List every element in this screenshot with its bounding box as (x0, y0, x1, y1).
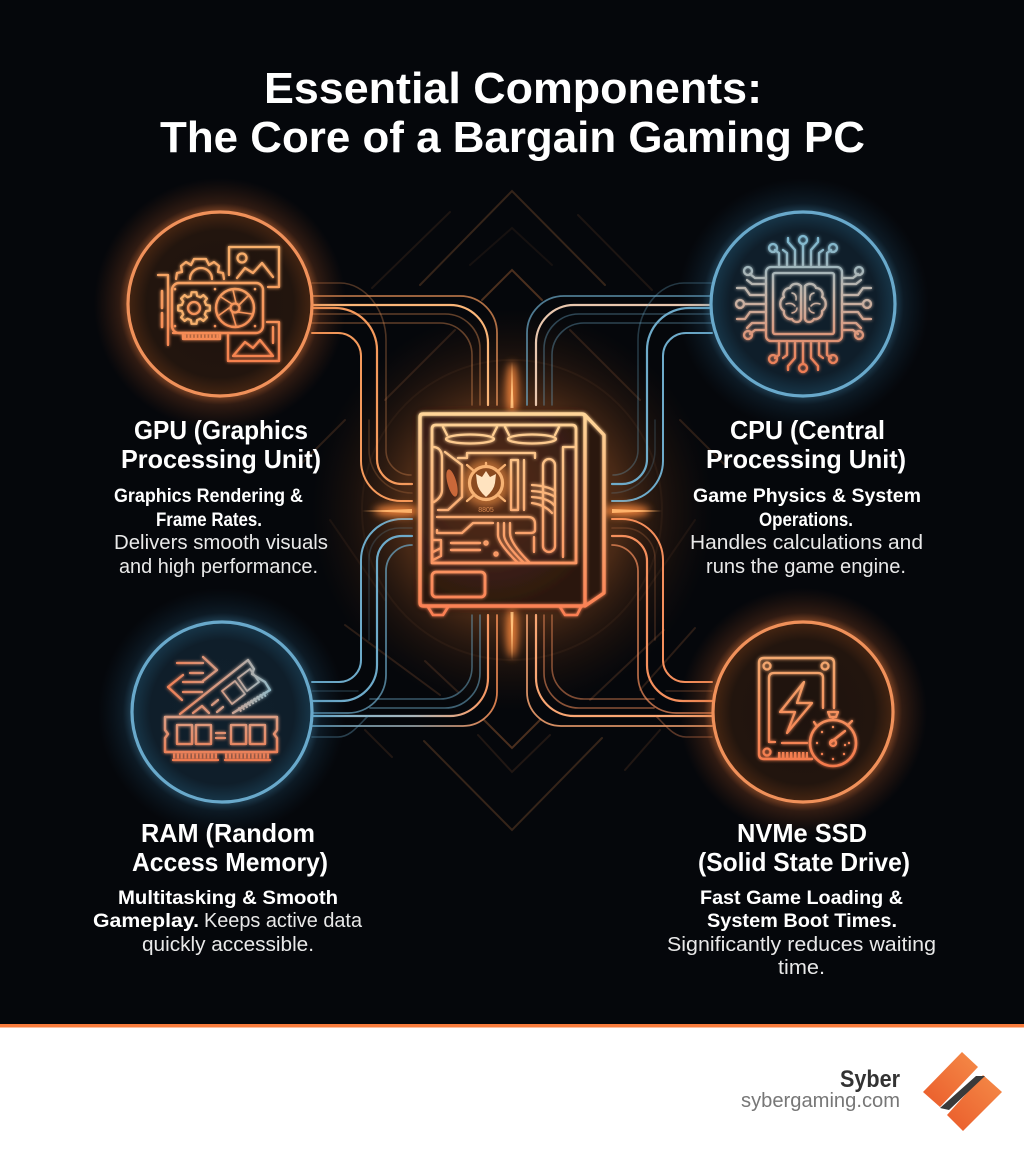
heading: SSD: (Solid State Drive) (698, 847, 910, 877)
logo (923, 1052, 1002, 1131)
footer brand text: sybergaming.com (741, 1090, 900, 1112)
footer brand text: Syber (840, 1066, 900, 1093)
text: SSD description: time. (778, 957, 825, 979)
heading: SSD (698, 818, 910, 877)
energy sparks around case (362, 362, 662, 660)
circuit pipes: CPU to case (527, 283, 712, 501)
processor emblem: 8805 (478, 507, 494, 514)
heading: RAM: RAM (Random (141, 818, 315, 848)
text: GPU description (114, 486, 328, 578)
heading: GPU: GPU (Graphics (134, 415, 308, 445)
text: RAM description: Keeps active data (204, 910, 363, 932)
title: The Core of a Bargain Gaming PC (160, 113, 865, 162)
text: RAM description: Multitasking & Smooth (118, 888, 338, 909)
heading: GPU (121, 415, 321, 474)
icon: RAM circle (98, 588, 346, 836)
heading: SSD: NVMe SSD (737, 818, 867, 848)
text: CPU description: Handles calculations and (690, 532, 923, 554)
heading: CPU: Processing Unit) (706, 444, 906, 474)
processor emblem (462, 459, 510, 514)
text: CPU description: Operations. (759, 510, 853, 531)
text: GPU description: Delivers smooth visuals (114, 532, 328, 554)
background diamond pattern (300, 191, 725, 830)
text: RAM description (93, 888, 363, 956)
text: GPU description: Graphics Rendering & (114, 486, 303, 507)
text: SSD description: Fast Game Loading & (700, 888, 903, 909)
text: GPU description: and high performance. (119, 556, 318, 578)
footer band (0, 1024, 1024, 1154)
title (160, 64, 865, 162)
icon: GPU circle (94, 178, 346, 430)
text: CPU description: Game Physics & System (693, 486, 921, 507)
panel: NVMe SSD (667, 588, 936, 979)
panel: CPU (677, 178, 929, 578)
heading: CPU (706, 415, 906, 474)
text: SSD description: Significantly reduces waiting (667, 934, 936, 956)
title: Essential Components: (264, 64, 762, 113)
circuit pipes: RAM to case (310, 519, 497, 737)
heading: CPU: CPU (Central (730, 415, 885, 445)
panel: RAM (93, 588, 363, 956)
circuit pipes: SSD to case (527, 519, 714, 737)
text: CPU description: runs the game engine. (706, 556, 906, 578)
center glow (312, 310, 712, 710)
text: SSD description (667, 888, 936, 979)
central PC case icon (420, 414, 604, 615)
icon: CPU circle (677, 178, 929, 430)
circuit pipes: GPU to case (312, 283, 497, 501)
heading: RAM: Access Memory) (132, 847, 328, 877)
footer brand text (741, 1066, 900, 1112)
panel: GPU (94, 178, 346, 578)
heading: RAM (132, 818, 328, 877)
text: CPU description (690, 486, 923, 578)
text: RAM description: Gameplay. (93, 911, 199, 932)
icon: SSD circle (679, 588, 927, 836)
heading: GPU: Processing Unit) (121, 444, 321, 474)
text: GPU description: Frame Rates. (156, 510, 262, 531)
text: SSD description: System Boot Times. (707, 911, 897, 932)
text: RAM description: quickly accessible. (142, 934, 314, 956)
